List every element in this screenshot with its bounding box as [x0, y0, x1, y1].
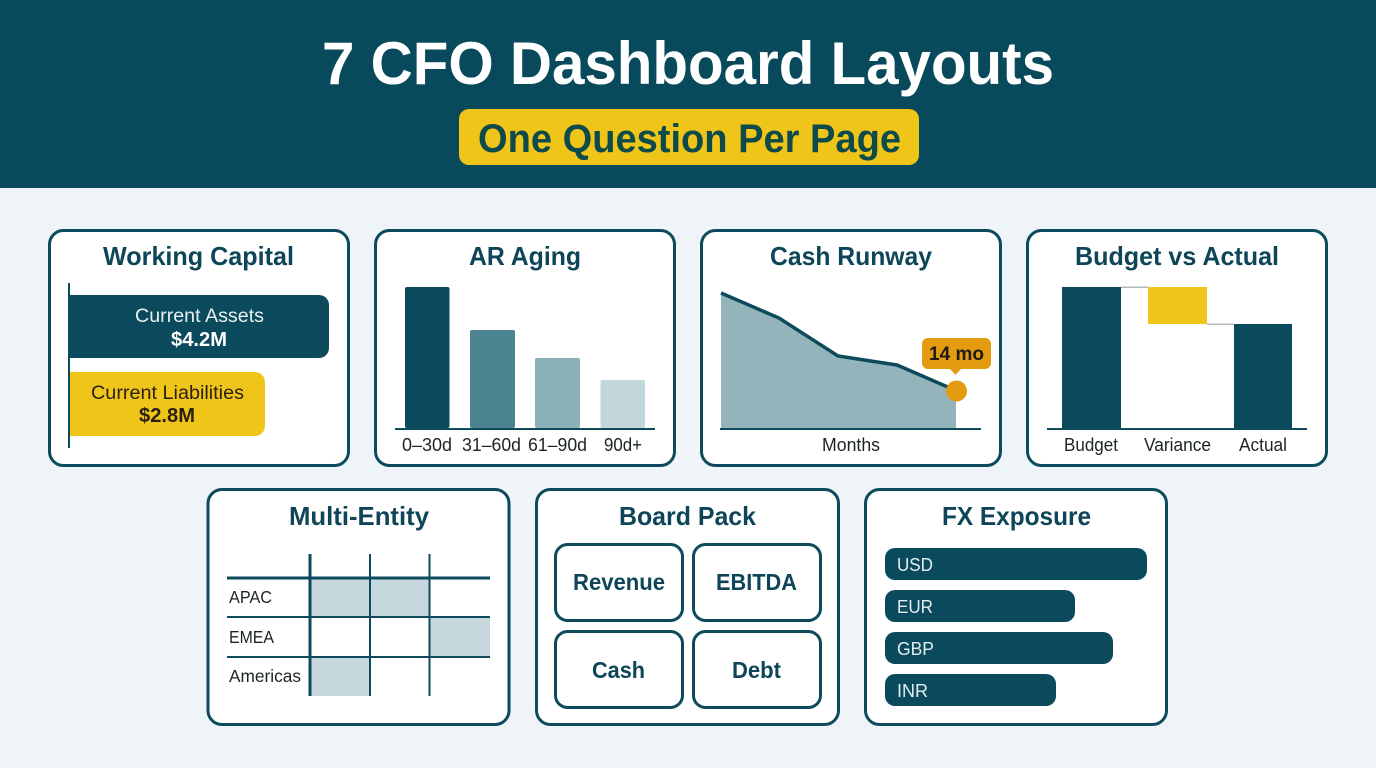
- tile: EBITDA: EBITDA: [716, 569, 797, 595]
- tile: revenue: [556, 544, 682, 620]
- waterfall chart: budget vs actual: Actual: [1239, 435, 1287, 455]
- tile: EBITDA: [694, 544, 820, 620]
- panel: board pack: [536, 490, 838, 724]
- bar: current assets: [70, 295, 329, 358]
- panel: working capital: Working Capital: [103, 241, 294, 271]
- title: 7 CFO Dashboard Layouts: [322, 30, 1054, 97]
- bar: GBP: GBP: [897, 639, 934, 659]
- bar chart: AR aging: 90d+: [604, 435, 642, 455]
- bar: EUR: EUR: [897, 597, 933, 617]
- panel: multi-entity: Multi-Entity: [289, 501, 430, 531]
- bar: USD: USD: [897, 555, 933, 575]
- tile: debt: Debt: [732, 657, 781, 683]
- tile: revenue: Revenue: [573, 569, 665, 595]
- waterfall chart: budget vs actual: [1047, 286, 1307, 455]
- heatmap grid: entities: [227, 554, 490, 696]
- tile: debt: [694, 632, 820, 708]
- bar: current liabilities: $2.8M: [139, 405, 195, 427]
- bar: INR: INR: [897, 681, 928, 701]
- heatmap grid: entities: APAC: [229, 587, 272, 607]
- tile: cash: Cash: [592, 657, 645, 683]
- heatmap grid: entities: Americas: [229, 666, 301, 686]
- callout: 14 months marker: 14 mo: [929, 343, 984, 365]
- bar: INR: [885, 674, 1056, 706]
- panel: FX exposure: [866, 490, 1166, 724]
- bar: current liabilities: Current Liabilities: [91, 382, 244, 404]
- waterfall chart: budget vs actual: Variance: [1144, 435, 1211, 455]
- bar: current assets: Current Assets: [135, 305, 264, 327]
- tile: cash: [556, 632, 682, 708]
- waterfall chart: budget vs actual: Budget: [1064, 435, 1118, 455]
- bar: GBP: [885, 632, 1113, 664]
- bar: EUR: [885, 590, 1075, 622]
- bar chart: AR aging: 31–60d: [462, 435, 521, 455]
- panel: working capital: [50, 230, 348, 466]
- heatmap grid: entities: EMEA: [229, 627, 274, 647]
- bar chart: AR aging: [395, 287, 655, 455]
- bar chart: AR aging: 61–90d: [528, 435, 587, 455]
- bar: current assets: $4.2M: [171, 329, 227, 351]
- panel: cash runway: Cash Runway: [770, 241, 932, 271]
- panel: multi-entity: [208, 490, 509, 724]
- subtitle pill: One Question Per Page: [478, 117, 901, 161]
- area chart: cash runway: [720, 293, 981, 455]
- panel: cash runway: [702, 230, 1000, 466]
- area chart: cash runway: Months: [822, 435, 880, 455]
- bar: USD: [885, 548, 1147, 580]
- panel: AR aging: [376, 230, 674, 466]
- panel: budget vs actual: [1028, 230, 1326, 466]
- panel: FX exposure: FX Exposure: [942, 501, 1091, 531]
- panel: AR aging: AR Aging: [469, 241, 581, 271]
- bar chart: AR aging: 0–30d: [402, 435, 452, 455]
- header banner: [0, 0, 1376, 188]
- panel: board pack: Board Pack: [619, 501, 757, 531]
- bar: current liabilities: [70, 372, 265, 436]
- panel: budget vs actual: Budget vs Actual: [1075, 241, 1279, 271]
- callout: 14 months marker: [922, 338, 991, 402]
